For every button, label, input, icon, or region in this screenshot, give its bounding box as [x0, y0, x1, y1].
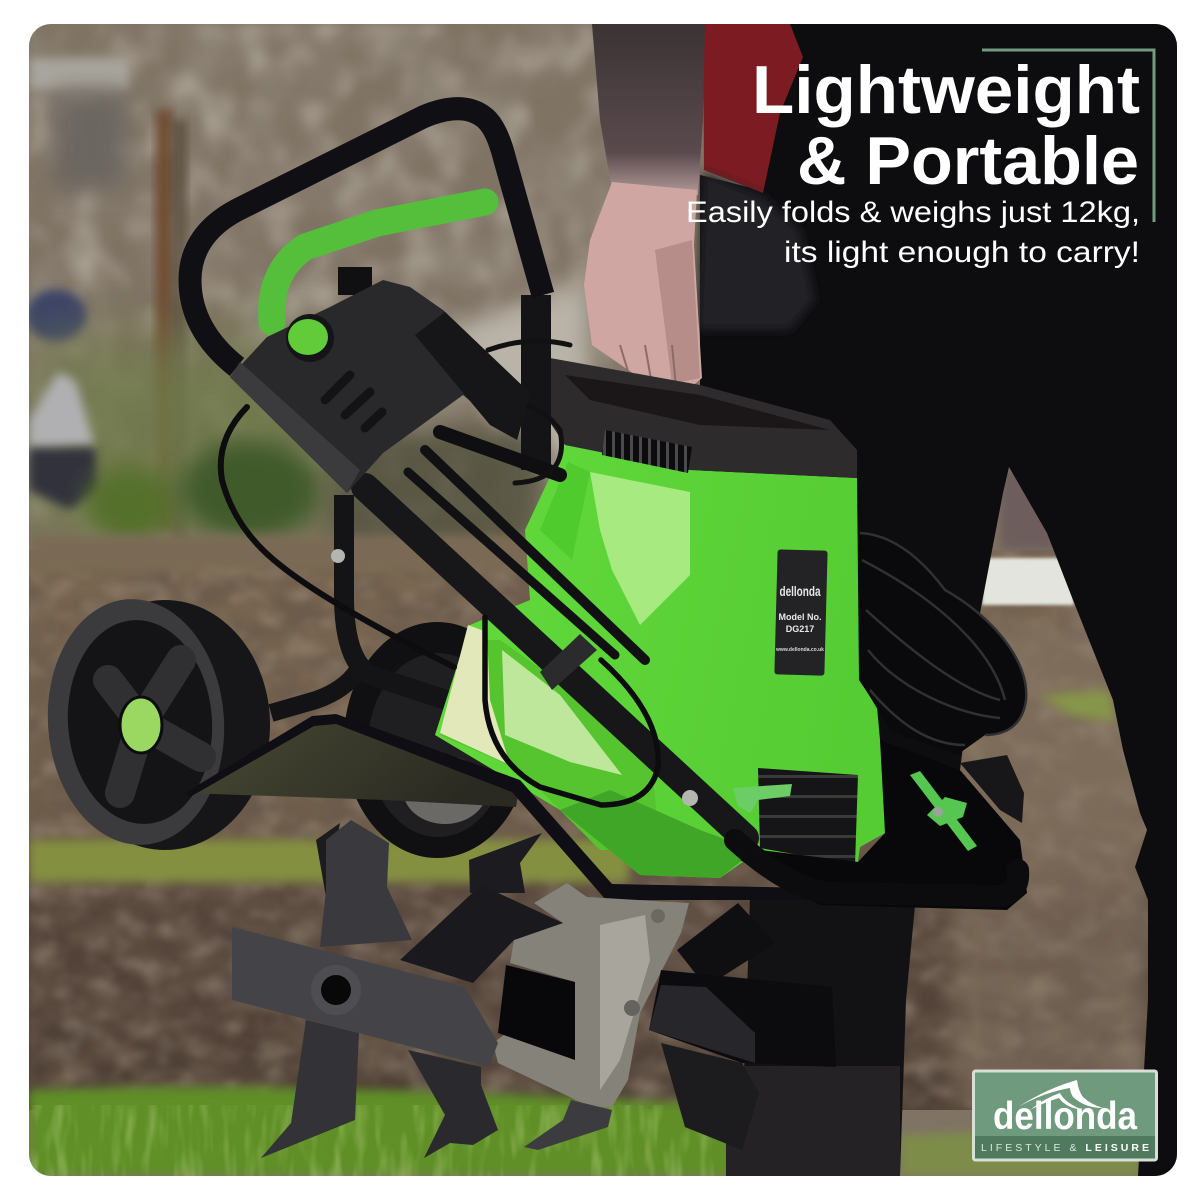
tine hub — [311, 965, 361, 1015]
tiller — [40, 109, 1027, 1158]
red shirt — [703, 24, 803, 193]
front wheel — [40, 593, 270, 851]
power cable coil — [860, 533, 1026, 755]
logo swoosh — [1018, 1080, 1103, 1110]
logo wordmark: dellonda — [993, 1095, 1137, 1138]
bare arm — [592, 24, 705, 195]
heading: Lightweight — [752, 52, 1140, 128]
denim patch — [697, 172, 815, 330]
deflector tray left — [185, 717, 520, 807]
control box — [230, 280, 530, 493]
tines — [232, 820, 836, 1158]
bolts — [331, 549, 698, 806]
heading: & Portable — [797, 123, 1139, 199]
main handle loop — [190, 109, 543, 367]
cable tie — [540, 634, 597, 690]
axle tubes — [271, 670, 358, 713]
lower leg — [744, 900, 915, 1175]
subheading: Easily folds & weighs just 12kg, — [686, 196, 1140, 229]
green button — [286, 314, 334, 362]
person — [584, 24, 1177, 1176]
logo tagline: LIFESTYLE & LEISURE — [981, 1142, 1149, 1154]
model label — [774, 549, 828, 676]
right tray — [740, 740, 1027, 910]
subheading — [686, 196, 1140, 269]
dellonda logo — [974, 1071, 1156, 1160]
plug — [960, 755, 1024, 823]
wheel hub — [120, 697, 162, 753]
subheading: its light enough to carry! — [784, 236, 1140, 269]
heading bracket — [982, 50, 1154, 222]
model label: www.dellonda.co.uk — [775, 647, 824, 653]
rear tines — [316, 823, 775, 1158]
green bracket — [733, 784, 792, 813]
model label: dellonda — [780, 583, 821, 599]
gearbox — [493, 883, 689, 1107]
heading — [752, 52, 1140, 199]
green motor body — [435, 445, 895, 878]
jeans and torso — [700, 24, 1177, 1176]
rear wheel — [344, 622, 530, 858]
folded handle tubes — [190, 109, 1018, 896]
side vent — [758, 768, 858, 865]
black top cap — [525, 358, 857, 478]
model label: DG217 — [786, 624, 814, 634]
green grip — [272, 202, 485, 322]
hand — [584, 182, 702, 388]
green fold knob — [910, 771, 977, 851]
model label: Model No. — [778, 612, 822, 622]
